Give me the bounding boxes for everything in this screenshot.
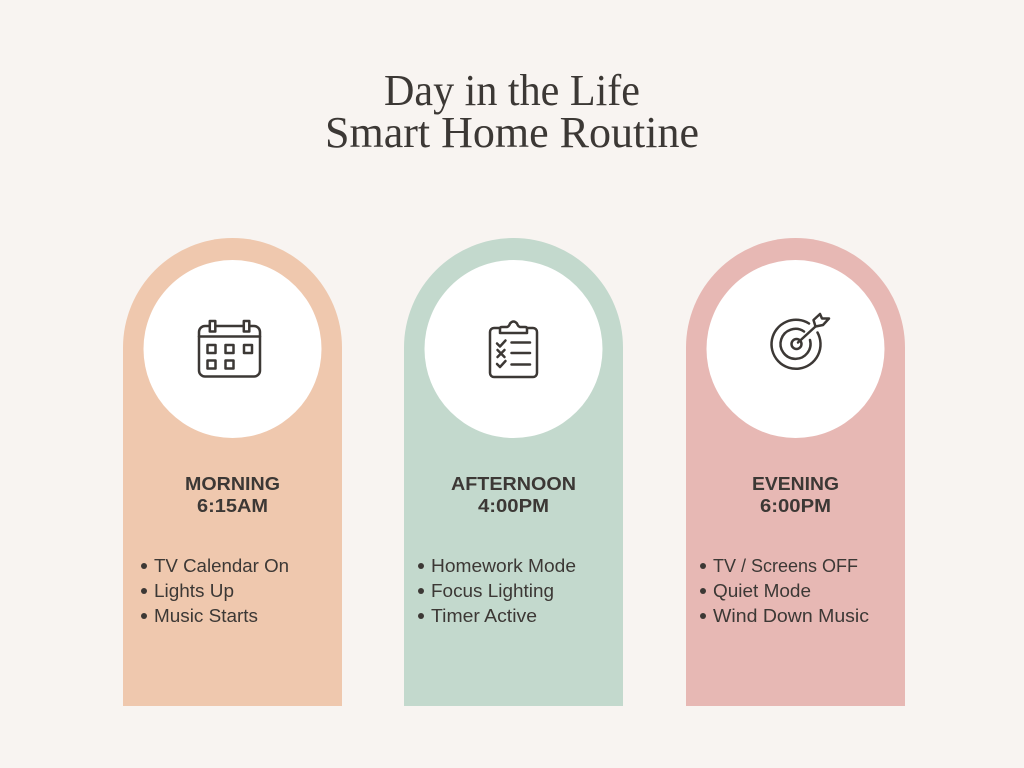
heading: afternoon: AFTERNOON xyxy=(451,474,576,494)
list: afternoon: Homework Mode xyxy=(431,556,576,576)
list: morning xyxy=(141,556,289,626)
list: afternoon xyxy=(418,556,576,626)
icon: target with arrow xyxy=(772,314,829,369)
list: afternoon: Focus Lighting xyxy=(431,581,554,601)
title: Smart Home Routine xyxy=(325,108,699,157)
list: morning: Lights Up xyxy=(154,581,234,601)
heading: evening: EVENING xyxy=(752,474,839,494)
heading: afternoon: 4:00PM xyxy=(478,496,549,516)
panel: morning xyxy=(123,238,342,706)
heading: evening: 6:00PM xyxy=(760,496,831,516)
panel: afternoon xyxy=(404,238,623,706)
title xyxy=(325,66,699,157)
panel: evening xyxy=(686,238,905,706)
icon: clipboard checklist xyxy=(490,322,537,377)
list: afternoon: Timer Active xyxy=(431,606,537,626)
heading: evening xyxy=(752,474,839,516)
title: Day in the Life xyxy=(384,66,640,115)
list: morning: TV Calendar On xyxy=(154,556,289,576)
heading: morning: MORNING xyxy=(185,474,280,494)
list: evening xyxy=(700,556,869,626)
list: evening: TV / Screens OFF xyxy=(713,556,858,576)
heading: morning: 6:15AM xyxy=(197,496,268,516)
list: evening: Quiet Mode xyxy=(713,581,811,601)
heading: afternoon xyxy=(451,474,576,516)
heading: morning xyxy=(185,474,280,516)
icon: calendar xyxy=(199,321,260,376)
list: evening: Wind Down Music xyxy=(713,606,869,626)
list: morning: Music Starts xyxy=(154,606,258,626)
